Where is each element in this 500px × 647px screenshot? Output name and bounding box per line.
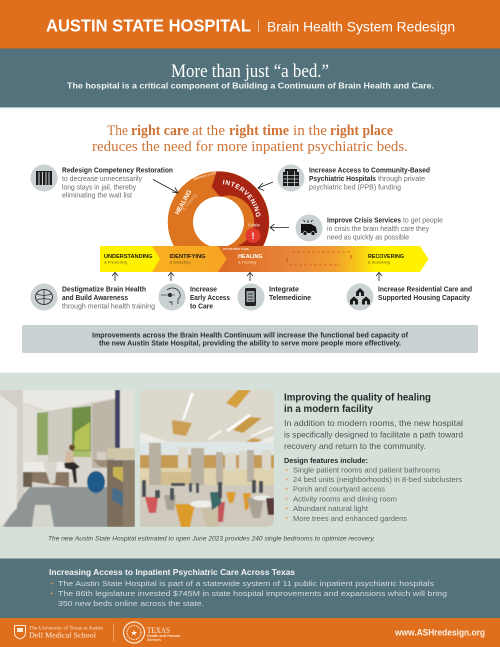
continuum arrow bar: HEALING bbox=[238, 254, 262, 260]
callout: functional bed capacity bbox=[22, 325, 478, 353]
list: design features: + bbox=[285, 497, 289, 503]
orange headline: right time bbox=[229, 122, 289, 139]
logo: Texas Health and Human Services: ★ bbox=[130, 628, 138, 638]
item: early access to care: Increase bbox=[190, 286, 217, 294]
orange headline: in the bbox=[293, 122, 327, 139]
panel: statewide access: Increasing Access to Inpatient Psychiatric Care Across Texas bbox=[49, 568, 296, 577]
panel: statewide access: The Austin State Hospital is part of a statewide system of 11 public inpatient psychiatric hospitals bbox=[58, 579, 434, 588]
item: community-based psychiatric hospitals: Increase Access to Community-Based bbox=[309, 168, 430, 174]
item: telemedicine: Integrate bbox=[269, 286, 299, 294]
text block: improving the quality: recovery and return to the community. bbox=[284, 441, 426, 451]
list: design features bbox=[284, 456, 462, 523]
orange headline: The bbox=[107, 122, 128, 139]
icon: jail bars bbox=[30, 164, 58, 192]
ring label: intervening: INTERVENING bbox=[222, 180, 260, 217]
item: crisis services: Improve Crisis Services bbox=[327, 218, 401, 224]
item: community-based psychiatric hospitals: psychiatric bed (PPB) funding bbox=[309, 184, 401, 192]
item: residential care and housing: Increase Residential Care and bbox=[378, 286, 472, 294]
continuum arrow bar: & Preventing bbox=[104, 260, 127, 264]
panel: statewide access: + bbox=[50, 582, 54, 588]
list: design features: + bbox=[285, 487, 289, 493]
arrows pointing to the continuum bbox=[112, 180, 382, 281]
list: design features: + bbox=[285, 468, 289, 474]
item: residential care and housing bbox=[346, 284, 472, 310]
ring label: healing: HEALING bbox=[174, 189, 193, 216]
item: crisis services: to get people bbox=[403, 218, 443, 224]
chevron: identifying bbox=[150, 246, 226, 272]
teal intro band bbox=[0, 48, 500, 108]
panel: statewide access bbox=[0, 558, 500, 618]
brain health continuum diagram: ring bbox=[168, 171, 270, 246]
icon: head with target bbox=[158, 284, 186, 310]
footer band bbox=[0, 618, 500, 647]
item: telemedicine: Telemedicine bbox=[269, 295, 311, 302]
list: design features: 24 bed units (neighborhoods) in 8-bed subclusters bbox=[293, 475, 462, 484]
chevron: understanding bbox=[100, 246, 160, 272]
website link: www.ASHredesign.org bbox=[394, 628, 485, 638]
title: AUSTIN STATE HOSPITAL bbox=[46, 16, 251, 36]
list: design features: + bbox=[285, 506, 289, 512]
panel: modern facility bbox=[0, 372, 500, 558]
item: community-based psychiatric hospitals: Psychiatric Hospitals bbox=[309, 176, 376, 183]
logo: Texas Health and Human Services: TEXAS bbox=[147, 626, 170, 635]
callout: functional bed capacity: Improvements across the Brain Health Continuum will increase the functional bed capacity of bbox=[92, 330, 409, 340]
list: design features: More trees and enhanced gardens bbox=[293, 514, 407, 523]
item: early access to care: to Care bbox=[190, 304, 213, 310]
panel: statewide access: The 86th legislature invested $745M in state hospital improvements and expansions which will bring bbox=[58, 589, 447, 598]
photo: common room bbox=[140, 390, 274, 527]
icon: tablet bbox=[238, 284, 264, 310]
continuum arrow bar: & Detecting bbox=[170, 260, 190, 264]
logo: Texas Health and Human Services bbox=[124, 622, 180, 643]
list: design features: Design features include: bbox=[284, 456, 368, 465]
list: design features: Porch and courtyard access bbox=[293, 484, 385, 494]
item: early access to care bbox=[158, 284, 230, 310]
orange headline: at the bbox=[192, 122, 225, 139]
continuum arrow bar: IDENTIFYING bbox=[170, 254, 206, 260]
item: redesign competency restoration: long stays in jail, thereby bbox=[62, 184, 136, 192]
item: community-based psychiatric hospitals: through private bbox=[378, 176, 425, 183]
item: crisis services bbox=[296, 214, 443, 242]
photo: patient room bbox=[0, 390, 135, 527]
intro subheading: The hospital is a critical component of Building a Continuum of Brain Health and Care. bbox=[67, 80, 434, 90]
subtitle: Brain Health System Redesign bbox=[267, 20, 455, 34]
list: design features: + bbox=[285, 516, 289, 522]
item: crisis services: in crisis the brain health care they bbox=[327, 226, 429, 233]
continuum arrow bar: RECOVERING bbox=[368, 254, 404, 260]
icon: hospital building bbox=[278, 164, 304, 192]
orange headline: reduces the need for more inpatient psychiatric beds. bbox=[92, 138, 408, 155]
text block: improving the quality: Improving the quality of healing bbox=[284, 392, 431, 404]
item: community-based psychiatric hospitals bbox=[278, 164, 430, 192]
photo caption: The new Austin State Hospital estimated to open June 2023 provides 240 single bedrooms to optimize recovery. bbox=[48, 536, 375, 542]
logo: Dell Medical School: The University of Texas at Austin bbox=[29, 624, 103, 632]
text block: improving the quality: in a modern facility bbox=[284, 404, 373, 415]
item: destigmatize brain health: through mental health training bbox=[62, 304, 155, 310]
icon: houses bbox=[346, 284, 374, 310]
list: design features: + bbox=[285, 478, 289, 484]
item: early access to care: Early Access bbox=[190, 295, 230, 302]
item: telemedicine bbox=[238, 284, 311, 310]
panel: statewide access: 350 new beds online across the state. bbox=[58, 599, 204, 608]
logo: Texas Health and Human Services: Health and Human bbox=[147, 634, 180, 638]
ring label: crisis: Crisis bbox=[248, 222, 260, 228]
ring segment: intervening bbox=[212, 172, 269, 246]
continuum arrow bar: & Sustaining bbox=[368, 260, 390, 264]
list: design features: Single patient rooms and patient bathrooms bbox=[293, 466, 440, 474]
orange headline: right care bbox=[131, 122, 189, 139]
logo: Dell Medical School: Dell Medical School bbox=[29, 630, 97, 640]
list: design features: Activity rooms and dining room bbox=[293, 494, 397, 504]
item: residential care and housing: Supported Housing Capacity bbox=[378, 295, 470, 302]
continuum arrow bar bbox=[100, 246, 428, 272]
item: redesign competency restoration: eliminating the wait list bbox=[62, 192, 132, 200]
continuum arrow bar: & Treating bbox=[238, 260, 256, 264]
intro heading: More than just “a bed.” bbox=[171, 61, 329, 82]
item: destigmatize brain health: and Build Awareness bbox=[62, 295, 128, 302]
icon: brain bbox=[30, 284, 58, 310]
item: destigmatize brain health bbox=[30, 284, 155, 310]
logo: Dell Medical School bbox=[14, 624, 103, 640]
item: destigmatize brain health: Destigmatize Brain Health bbox=[62, 286, 146, 294]
callout: functional bed capacity: the new Austin State Hospital, providing the ability to serve more people more effectively. bbox=[99, 338, 401, 348]
text block: improving the quality bbox=[284, 392, 463, 451]
header band bbox=[0, 0, 500, 48]
item: crisis services: need as quickly as possible bbox=[327, 234, 409, 242]
orange headline: right place bbox=[330, 122, 393, 139]
ring label: inpatient care: INPATIENT CARE bbox=[193, 171, 217, 181]
text block: improving the quality: is specifically designed to facilitate a path toward bbox=[284, 430, 463, 440]
item: redesign competency restoration: to decrease unnecessarily bbox=[62, 176, 142, 183]
panel: statewide access: + bbox=[50, 592, 54, 598]
continuum arrow bar: OUTPATIENT CARE bbox=[223, 247, 249, 251]
icon: ambulance bbox=[296, 214, 322, 242]
item: redesign competency restoration bbox=[30, 164, 173, 200]
logo: Texas Health and Human Services: Services bbox=[147, 638, 161, 642]
bar labels: UNDERSTANDING bbox=[104, 254, 152, 260]
text block: improving the quality: In addition to modern rooms, the new hospital bbox=[284, 418, 463, 428]
orange headline bbox=[92, 122, 408, 155]
icon: crisis alert: ! bbox=[252, 231, 254, 241]
brain health continuum diagram: ring: & Treating bbox=[181, 193, 199, 212]
item: redesign competency restoration: Redesign Competency Restoration bbox=[62, 168, 173, 174]
list: design features: Abundant natural light bbox=[293, 504, 368, 513]
